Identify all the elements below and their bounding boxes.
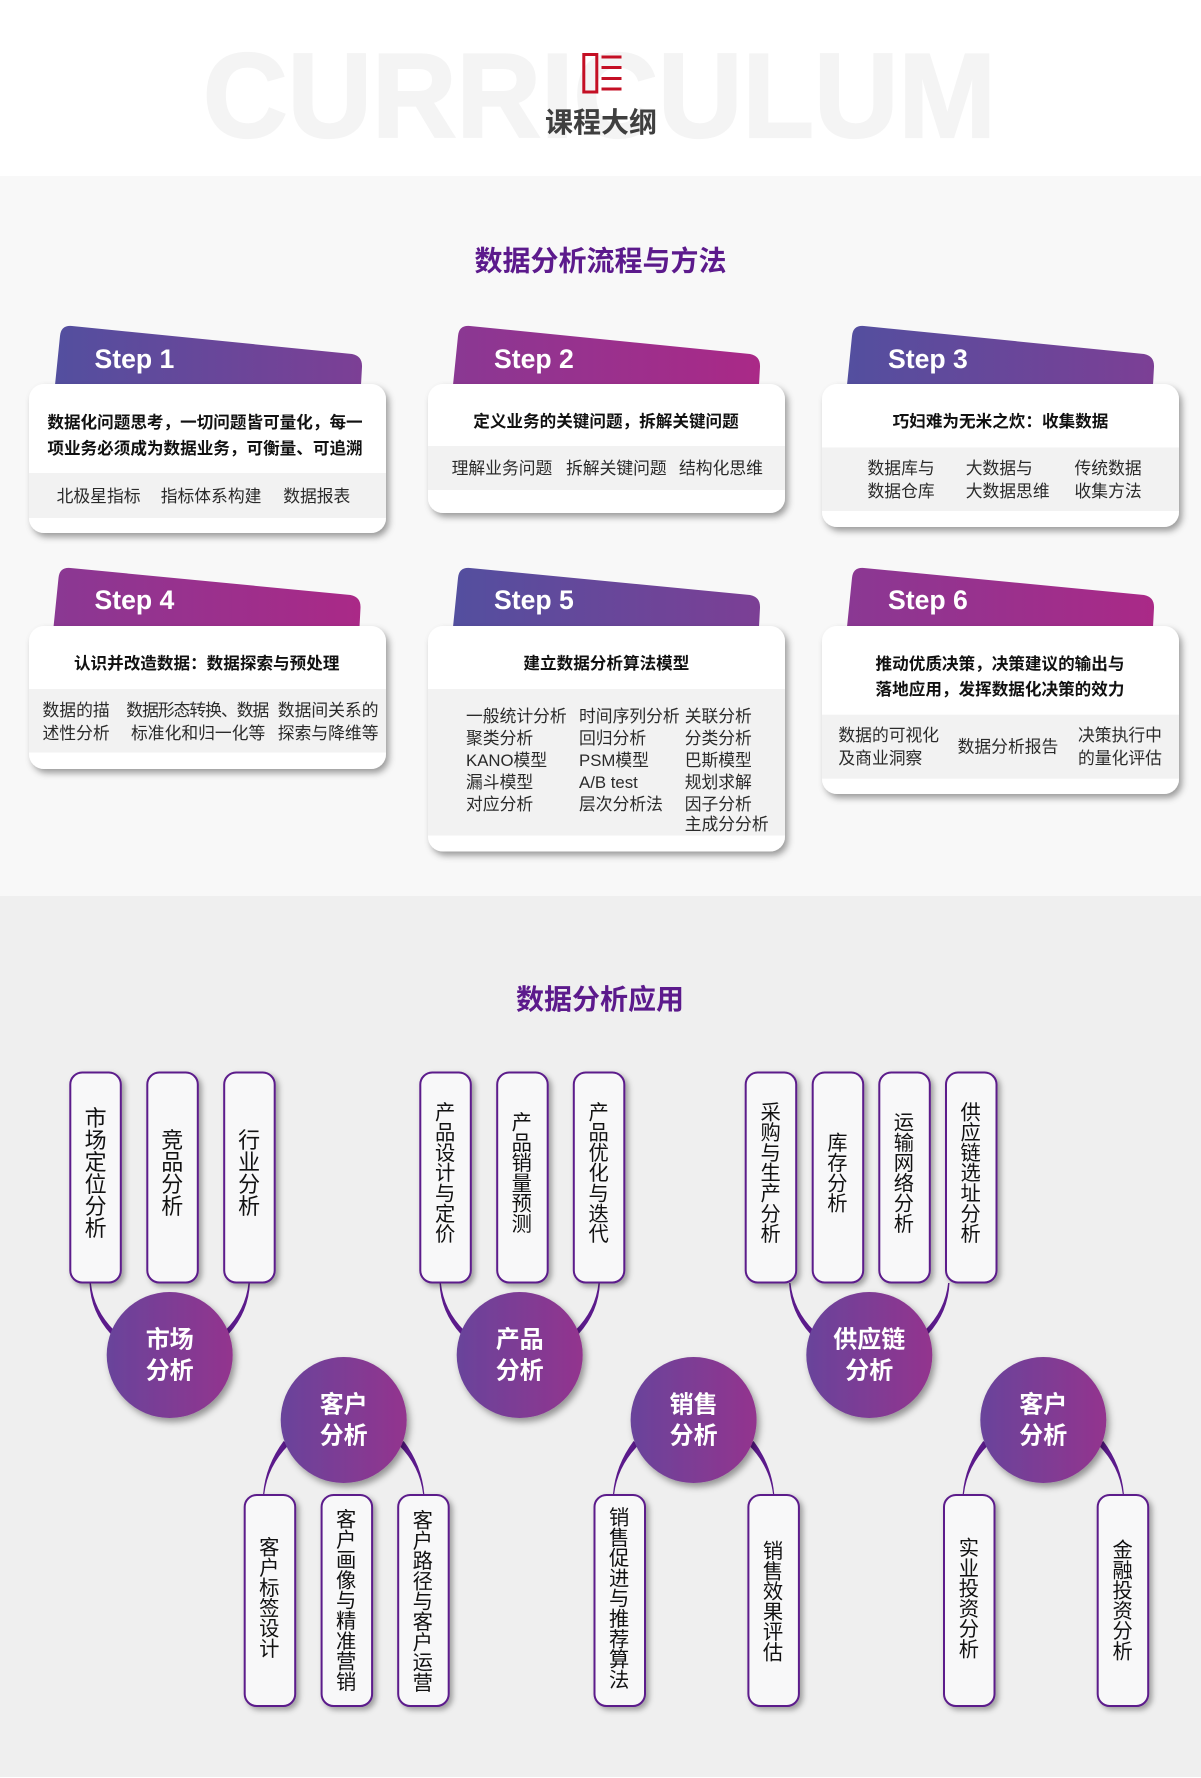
pill: sales forecast: [497, 1072, 548, 1282]
circle: sales analysis: 分析: [670, 1422, 718, 1450]
pill: industry analysis: 行业分析: [235, 1128, 260, 1217]
label: step 4: Step 4: [94, 585, 175, 615]
pill: industrial investment: 实业投资分析: [955, 1537, 979, 1659]
items: step 4: 标准化和归一化等: [131, 724, 265, 743]
section heading: applications: 数据分析应用: [516, 984, 684, 1015]
label: step 2: Step 2: [494, 344, 574, 374]
items: step 3: [868, 459, 1142, 501]
tab: step 1: [55, 326, 362, 385]
items: step 5: 层次分析法: [579, 795, 663, 814]
heading text: step 1: 项业务必须成为数据业务，可衡量、可追溯: [47, 435, 363, 459]
heading text: step 1: [47, 409, 363, 459]
tab: step 4: [54, 568, 361, 627]
items: step 2: 理解业务问题: [452, 459, 553, 478]
items: step 5: 分类分析: [685, 729, 752, 748]
items: step 6: 数据的可视化: [838, 726, 939, 745]
circle: investment customer analysis: 客户: [1019, 1390, 1067, 1418]
items: step 1: 数据报表: [283, 487, 351, 506]
panel: step 6: [822, 568, 1179, 794]
pill: product design: [420, 1072, 471, 1282]
pill: sales evaluation: 销售效果评估: [759, 1540, 783, 1662]
pill: financial investment: [1098, 1495, 1148, 1706]
circle: sales analysis: 销售: [670, 1392, 718, 1418]
card: step 3: [822, 384, 1179, 527]
items: step 5: 聚类分析: [466, 729, 533, 748]
items: step 5: 对应分析: [466, 795, 533, 814]
items: step 5: 因子分析: [685, 795, 752, 814]
items: step 5: PSM模型: [579, 751, 649, 770]
group: investment customer analysis: [944, 1357, 1148, 1706]
heading text: step 3: 巧妇难为无米之炊：收集数据: [893, 408, 1108, 432]
connector: sales left: [613, 1441, 639, 1494]
card: step 1: [29, 384, 386, 533]
items: step 4: 述性分析: [42, 724, 110, 743]
card: step 5: [428, 626, 785, 852]
pill: sales promotion: [594, 1495, 645, 1706]
group: customer analysis: [245, 1357, 449, 1706]
connector: supply right: [924, 1283, 950, 1334]
items: step 5: [466, 707, 769, 834]
band: step 2 items: [428, 446, 785, 490]
group: market analysis: [70, 1072, 275, 1418]
tab: step 3: [847, 326, 1154, 385]
pill: customer persona: 客户画像与精准营销: [332, 1509, 356, 1691]
band: step 1 items: [29, 473, 386, 518]
connector: market right: [225, 1283, 250, 1334]
band: step 3 items: [822, 448, 1179, 511]
circle: product analysis: [457, 1292, 583, 1418]
pill: inventory: 库存分析: [823, 1132, 848, 1213]
connector: customer right: [399, 1441, 424, 1494]
circle: market analysis: 市场: [146, 1326, 194, 1354]
card: step 4: [29, 626, 386, 769]
group: product analysis: [420, 1072, 624, 1418]
tab: step 2: [453, 326, 760, 385]
items: step 1: 指标体系构建: [161, 487, 262, 506]
connector: supply left: [789, 1283, 814, 1334]
section heading: process and methods: 数据分析流程与方法: [474, 246, 727, 276]
pill: customer persona: [322, 1495, 372, 1706]
label: step 3: Step 3: [888, 344, 968, 374]
background word: CURRICULUM: CURRICULUM: [203, 29, 996, 163]
items: step 5: 关联分析: [685, 707, 752, 726]
items: step 3: 大数据与: [966, 459, 1033, 478]
pill: site selection: 供应链选址分析: [957, 1101, 981, 1244]
items: step 3: 传统数据: [1074, 459, 1142, 478]
pill: inventory: [813, 1072, 863, 1282]
pill: customer tags: [245, 1495, 295, 1706]
heading text: step 2: 定义业务的关键问题，拆解关键问题: [473, 408, 739, 432]
connector: investment right: [1098, 1441, 1124, 1494]
band: step 6 items: [822, 715, 1179, 779]
items: step 5: A/B test: [579, 773, 638, 792]
circle: investment customer analysis: 分析: [1019, 1422, 1067, 1450]
items: step 5: 漏斗模型: [466, 773, 533, 792]
connector: product left: [440, 1283, 465, 1334]
items: step 2: 拆解关键问题: [566, 459, 667, 478]
group: supply chain analysis: [746, 1072, 996, 1418]
label: step 1: Step 1: [94, 344, 175, 374]
heading text: step 4: 认识并改造数据：数据探索与预处理: [74, 650, 340, 674]
pill: customer tags: 客户标签设计: [255, 1536, 279, 1658]
items: step 4: 数据的描: [42, 701, 110, 720]
items: step 2: 结构化思维: [679, 459, 763, 478]
items: step 6: 数据分析报告: [958, 737, 1058, 756]
circle: supply chain analysis: [806, 1292, 932, 1418]
items: step 5: KANO模型: [466, 751, 547, 770]
items: step 6: [838, 726, 1162, 768]
items: step 2: [452, 459, 763, 478]
panel: step 3: [822, 326, 1179, 527]
circle: market analysis: 分析: [146, 1358, 194, 1384]
pill: market positioning: [70, 1072, 121, 1282]
items: step 4: 数据形态转换、数据: [126, 701, 270, 720]
pill: procurement: 采购与生产分析: [757, 1101, 781, 1244]
heading text: step 1: 数据化问题思考，一切问题皆可量化，每一: [47, 409, 363, 433]
pill: sales promotion: 销售促进与推荐算法: [605, 1507, 629, 1689]
pill: competitor analysis: [147, 1072, 198, 1282]
circle: sales analysis: [631, 1357, 757, 1483]
card: step 6: [822, 626, 1179, 794]
pill: transport network: 运输网络分析: [890, 1112, 914, 1233]
connector: sales right: [749, 1441, 774, 1494]
group: sales analysis: [594, 1357, 799, 1706]
heading text: step 6: 落地应用，发挥数据化决策的效力: [876, 676, 1124, 700]
connector: customer left: [263, 1441, 289, 1494]
items: step 1: 北极星指标: [57, 487, 141, 506]
tab: step 5: [453, 568, 760, 627]
card: step 2: [428, 384, 785, 513]
items: step 5: 一般统计分析: [466, 707, 567, 726]
pill: sales evaluation: [748, 1495, 799, 1706]
circle: customer analysis: 客户: [320, 1390, 368, 1418]
circle: customer analysis: 分析: [320, 1422, 368, 1450]
pill: customer journey: 客户路径与客户运营: [409, 1510, 433, 1692]
circle: supply chain analysis: 分析: [845, 1358, 893, 1384]
panel: step 4: [29, 568, 386, 769]
connector: market left: [90, 1283, 115, 1334]
items: step 5: 回归分析: [579, 729, 646, 748]
panel: step 1: [29, 326, 386, 533]
pill: procurement: [746, 1072, 796, 1282]
title: 课程大纲: [545, 107, 657, 138]
items: step 3: 数据库与: [868, 459, 935, 478]
heading text: step 5: 建立数据分析算法模型: [523, 650, 689, 674]
items: step 3: 数据仓库: [868, 482, 935, 501]
items: step 3: 收集方法: [1074, 482, 1142, 501]
items: step 5: 规划求解: [685, 773, 752, 792]
items: step 6: 及商业洞察: [838, 749, 923, 768]
items: step 5: 巴斯模型: [685, 751, 752, 770]
pill: site selection: [946, 1072, 996, 1282]
pill: market positioning: 市场定位分析: [82, 1106, 107, 1239]
items: step 4: 探索与降维等: [278, 724, 379, 743]
heading text: step 6: 推动优质决策，决策建议的输出与: [876, 650, 1124, 674]
pill: product design: 产品设计与定价: [431, 1101, 455, 1244]
band: step 5 items: [428, 689, 785, 836]
connector: investment left: [963, 1441, 988, 1494]
pill: sales forecast: 产品销量预测: [508, 1111, 532, 1233]
items: step 5: 时间序列分析: [579, 707, 680, 726]
circle: investment customer analysis: [980, 1357, 1106, 1483]
heading text: step 6: [876, 650, 1124, 700]
pill: industry analysis: [224, 1072, 275, 1282]
circle: product analysis: 分析: [496, 1358, 544, 1384]
items: step 6: 的量化评估: [1078, 749, 1162, 768]
panel: step 5: [428, 568, 785, 852]
pill: financial investment: 金融投资分析: [1109, 1539, 1133, 1661]
label: step 6: Step 6: [888, 585, 968, 615]
label: step 5: Step 5: [494, 585, 574, 615]
items: step 4: [42, 701, 379, 743]
items: step 5: 主成分分析: [685, 815, 769, 834]
pill: customer journey: [398, 1495, 449, 1706]
items: step 4: 数据间关系的: [278, 701, 379, 720]
band: step 4 items: [29, 689, 386, 752]
items: step 3: 大数据思维: [966, 482, 1050, 501]
items: step 1: [57, 487, 351, 506]
circle: customer analysis: [281, 1357, 407, 1483]
icon: curriculum outline: [584, 54, 622, 92]
pill: industrial investment: [944, 1495, 994, 1706]
connector: product right: [575, 1283, 600, 1334]
pill: product iteration: [574, 1072, 624, 1282]
pill: product iteration: 产品优化与迭代: [585, 1101, 609, 1244]
panel: step 2: [428, 326, 785, 513]
circle: supply chain analysis: 供应链: [833, 1326, 905, 1354]
pill: transport network: [879, 1072, 930, 1282]
items: step 6: 决策执行中: [1078, 726, 1162, 745]
pill: competitor analysis: 竞品分析: [158, 1128, 183, 1217]
circle: product analysis: 产品: [496, 1326, 544, 1354]
tab: step 6: [847, 568, 1154, 627]
circle: market analysis: [107, 1292, 233, 1418]
